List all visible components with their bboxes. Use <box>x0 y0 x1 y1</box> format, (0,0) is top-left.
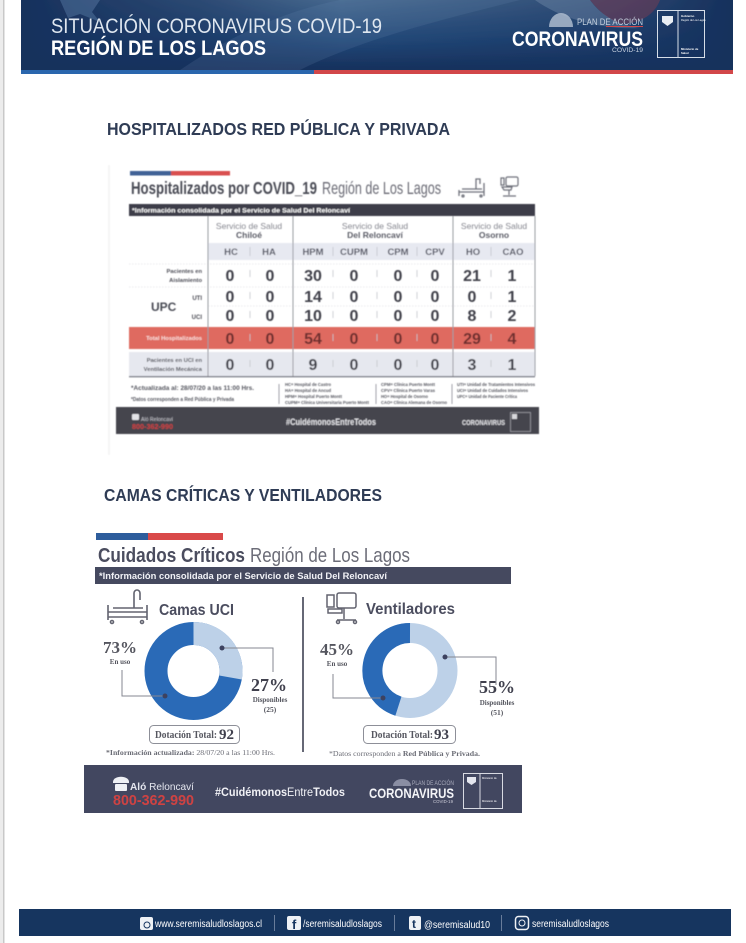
icon: telephone <box>113 777 129 791</box>
social footer <box>19 909 731 936</box>
icon: facebook: f <box>292 917 297 932</box>
row: aislamiento: 0 <box>266 268 275 285</box>
column headers: CPM <box>387 247 409 258</box>
row: aislamiento: 30 <box>304 268 322 285</box>
critical care footer band: PLAN DE ACCIÓN <box>412 778 454 787</box>
row: UCI: 2 <box>508 308 517 325</box>
dotacion total ventiladores <box>364 726 456 744</box>
header logo: ministerio de salud: Salud <box>681 51 689 55</box>
column groups: Servicio de Salud <box>461 221 527 231</box>
row: ventilacion: 9 <box>309 357 318 374</box>
total row <box>129 327 535 349</box>
row: ventilacion: 1 <box>508 357 517 374</box>
header logo: ministerio de salud: Región de Los Lagos <box>681 18 706 22</box>
callout: camas disponibles: (25) <box>264 705 277 714</box>
row: aislamiento: 1 <box>508 268 517 285</box>
column groups: Servicio de Salud <box>342 221 408 231</box>
abbreviations legend: HO= Hospital de Osorno <box>381 394 428 399</box>
column headers: HO <box>466 247 480 258</box>
row: UCI: 10 <box>304 308 322 325</box>
abbreviations legend: UTI= Unidad de Tratamientos Intensivos <box>457 382 536 387</box>
abbreviations legend: HPM= Hospital Puerto Montt <box>285 394 343 399</box>
row: UTI: 0 <box>394 289 403 306</box>
info bar: *Información consolidada por el Servicio de Salud Del Reloncaví <box>132 208 351 214</box>
row labels: UCI <box>192 315 202 321</box>
row labels: Pacientes en <box>167 269 202 275</box>
note: actualizada: *Información actualizada: 28/07/20 a las 11:00 Hrs. <box>106 748 275 757</box>
callout: camas disponibles: Disponibles <box>253 696 288 704</box>
dotacion total ventiladores: 93 <box>434 727 449 743</box>
column groups <box>216 221 527 240</box>
column groups: Servicio de Salud <box>216 221 282 231</box>
icon: ventilator <box>327 593 356 624</box>
row: UTI: 0 <box>350 289 359 306</box>
table footer band: #CuidémonosEntreTodos <box>286 417 376 428</box>
row: ventilacion: 0 <box>350 357 359 374</box>
note: datos: *Datos corresponden a Red Pública y Privada. <box>329 749 480 758</box>
critical care footer band: #CuidémonosEntreTodos <box>215 785 345 799</box>
panel title: Región de Los Lagos <box>250 544 410 567</box>
row: total: 54 <box>304 331 322 348</box>
row: total: 0 <box>266 331 275 348</box>
icon: ventilator <box>501 177 518 196</box>
header title: REGIÓN DE LOS LAGOS <box>51 35 266 60</box>
abbreviations legend: CAO= Clínica Alemana de Osorno <box>381 400 447 405</box>
row: UCI: 8 <box>468 308 477 325</box>
row labels <box>144 269 203 373</box>
dotacion total ventiladores: Dotación Total: <box>371 730 433 741</box>
abbreviations legend: HA= Hospital de Ancud <box>285 388 331 393</box>
column headers: HC <box>224 247 238 258</box>
row: total: 29 <box>463 331 481 348</box>
icon: facebook <box>287 916 301 932</box>
callout: camas en uso: 73% <box>103 638 137 657</box>
critical care footer band: Ministerio de <box>482 799 497 803</box>
critical care footer band: CORONAVIRUS <box>369 785 454 801</box>
column headers: HA <box>262 247 276 258</box>
icon: twitter <box>409 916 421 931</box>
dotacion total camas: Dotación Total: <box>155 730 217 741</box>
row: aislamiento: 0 <box>226 268 235 285</box>
row labels: Pacientes en UCI en <box>147 358 202 364</box>
panel title <box>98 544 410 567</box>
row labels: Aislamiento <box>169 278 202 284</box>
callout: ventiladores disponibles: (51) <box>491 708 504 717</box>
row: UTI: 0 <box>431 289 440 306</box>
row: total: 0 <box>226 331 235 348</box>
abbreviations legend <box>279 382 536 405</box>
critical care footer band: Ministerio de <box>482 776 497 780</box>
dotacion total camas: 92 <box>219 727 234 743</box>
row: ventilacion <box>226 357 517 374</box>
row labels: Ventilación Mecánica <box>144 367 203 373</box>
row: ventilacion: 0 <box>226 357 235 374</box>
abbreviations legend: CPV= Clínica Puerto Varas <box>381 388 436 393</box>
row: total: 4 <box>508 331 517 348</box>
header logo: plan de acción coronavirus: PLAN DE ACCIÓN <box>577 17 643 28</box>
column groups: Osorno <box>479 230 509 240</box>
info bar <box>95 567 511 584</box>
icon: website <box>140 917 153 930</box>
row labels: Total Hospitalizados <box>146 336 202 342</box>
table title: Hospitalizados por COVID_19 <box>131 178 317 198</box>
table footer band: CORONAVIRUS <box>462 420 505 427</box>
row: UCI: 0 <box>226 308 235 325</box>
callout: ventiladores en uso: En uso <box>327 660 348 668</box>
header logo: ministerio de salud: Ministerio de <box>681 47 699 51</box>
donut: ventiladores <box>372 633 448 708</box>
callout: camas disponibles: 27% <box>251 675 287 695</box>
table title: Región de Los Lagos <box>322 178 441 198</box>
abbreviations legend: CUPM= Clínica Universitaria Puerto Montt <box>285 400 370 405</box>
critical care footer band <box>84 765 522 813</box>
facebook: /seremisaludloslagos <box>303 919 382 930</box>
header logo: plan de acción coronavirus: COVID-19 <box>612 47 643 54</box>
callout: ventiladores disponibles: 55% <box>479 677 515 697</box>
abbreviations legend: HC= Hospital de Castro <box>285 382 331 387</box>
twitter: @seremisalud10 <box>424 920 490 931</box>
callout: camas en uso: En uso <box>110 658 131 666</box>
row: aislamiento: 0 <box>431 268 440 285</box>
table footer band <box>116 407 539 434</box>
row: total: 0 <box>394 331 403 348</box>
heading: camas criticas: CAMAS CRÍTICAS Y VENTILADORES <box>104 484 382 505</box>
row: aislamiento: 21 <box>463 268 481 285</box>
row: total: 0 <box>431 331 440 348</box>
row: UCI: 0 <box>266 308 275 325</box>
row: ventilacion: 0 <box>394 357 403 374</box>
column groups: Del Reloncaví <box>347 230 404 240</box>
table footer band: Aló Reloncaví <box>141 417 173 423</box>
header logo: ministerio de salud: Gobierno <box>681 14 695 18</box>
callout: camas en uso <box>103 638 168 698</box>
column headers: HPM <box>302 247 324 258</box>
update notes: *Datos corresponden a Red Pública y Privada <box>131 397 234 403</box>
column headers: CUPM <box>340 247 368 258</box>
row: aislamiento <box>226 268 517 285</box>
callout: ventiladores en uso: 45% <box>320 640 354 659</box>
header logo: ministerio de salud <box>658 10 706 58</box>
website: www.seremisaludloslagos.cl <box>154 919 262 930</box>
row: UCI <box>226 308 517 325</box>
row: UTI <box>226 289 517 306</box>
icon: hospital bed <box>108 590 147 624</box>
heading: hospitalizados: HOSPITALIZADOS RED PÚBLICA Y PRIVADA <box>107 118 450 139</box>
callout: ventiladores disponibles <box>442 654 515 717</box>
row labels: UTI <box>192 296 202 302</box>
critical care footer band: 800-362-990 <box>113 792 194 809</box>
row: UTI: 1 <box>508 289 517 306</box>
ventiladores heading: Ventiladores <box>366 601 455 618</box>
callout: camas disponibles <box>220 646 288 714</box>
camas uci heading: Camas UCI <box>159 602 234 619</box>
donut: camas uci <box>156 633 231 708</box>
divider <box>302 597 304 752</box>
row: ventilacion: 3 <box>468 357 477 374</box>
instagram: seremisaludloslagos <box>532 919 609 930</box>
callout: ventiladores disponibles: Disponibles <box>480 699 515 707</box>
abbreviations legend: UPC= Unidad de Paciente Crítica <box>457 394 517 399</box>
row: UTI: 14 <box>304 289 322 306</box>
critical care footer band: Aló Reloncaví <box>130 781 194 793</box>
row labels: UPC <box>151 300 177 314</box>
panel title: Cuidados Críticos <box>98 544 245 567</box>
info bar: *Información consolidada por el Servicio de Salud Del Reloncaví <box>99 571 387 582</box>
column headers: CPV <box>425 247 445 258</box>
row: aislamiento: 0 <box>394 268 403 285</box>
icon: twitter: t <box>412 917 416 931</box>
callout: ventiladores en uso <box>320 640 386 700</box>
update notes: *Actualizada al: 28/07/20 a las 11:00 Hrs. <box>131 385 254 392</box>
row: UTI: 0 <box>226 289 235 306</box>
row: aislamiento: 0 <box>350 268 359 285</box>
header banner <box>21 0 733 74</box>
row: UCI: 0 <box>431 308 440 325</box>
abbreviations legend: UCI= Unidad de Cuidados Intensivos <box>457 388 529 393</box>
icon: hospital bed <box>459 179 484 197</box>
column groups: Chiloé <box>236 230 262 240</box>
row: total <box>226 331 517 348</box>
icon: instagram <box>516 916 528 930</box>
critical care footer band: COVID-19 <box>433 799 453 804</box>
column headers: CAO <box>502 247 524 258</box>
header title: SITUACIÓN CORONAVIRUS COVID-19 <box>51 13 382 38</box>
panel: cuidados criticos <box>84 533 522 813</box>
ventilation row <box>129 352 535 376</box>
panel: hospitalizados table <box>108 165 539 455</box>
row: total: 0 <box>350 331 359 348</box>
header title <box>51 13 382 60</box>
row: UCI: 0 <box>350 308 359 325</box>
header logo: plan de acción coronavirus: CORONAVIRUS <box>512 28 643 51</box>
row: ventilacion: 0 <box>431 357 440 374</box>
header logo: plan de acción coronavirus <box>512 13 643 54</box>
update notes <box>131 385 254 403</box>
abbreviations legend: CPM= Clínica Puerto Montt <box>381 382 436 387</box>
row: UTI: 0 <box>468 289 477 306</box>
row: UCI: 0 <box>394 308 403 325</box>
row: UTI: 0 <box>266 289 275 306</box>
dotacion total camas <box>150 726 240 744</box>
row: ventilacion: 0 <box>266 357 275 374</box>
info bar <box>129 204 535 216</box>
table footer band: 800-362-990 <box>132 422 173 431</box>
column headers <box>224 247 524 258</box>
